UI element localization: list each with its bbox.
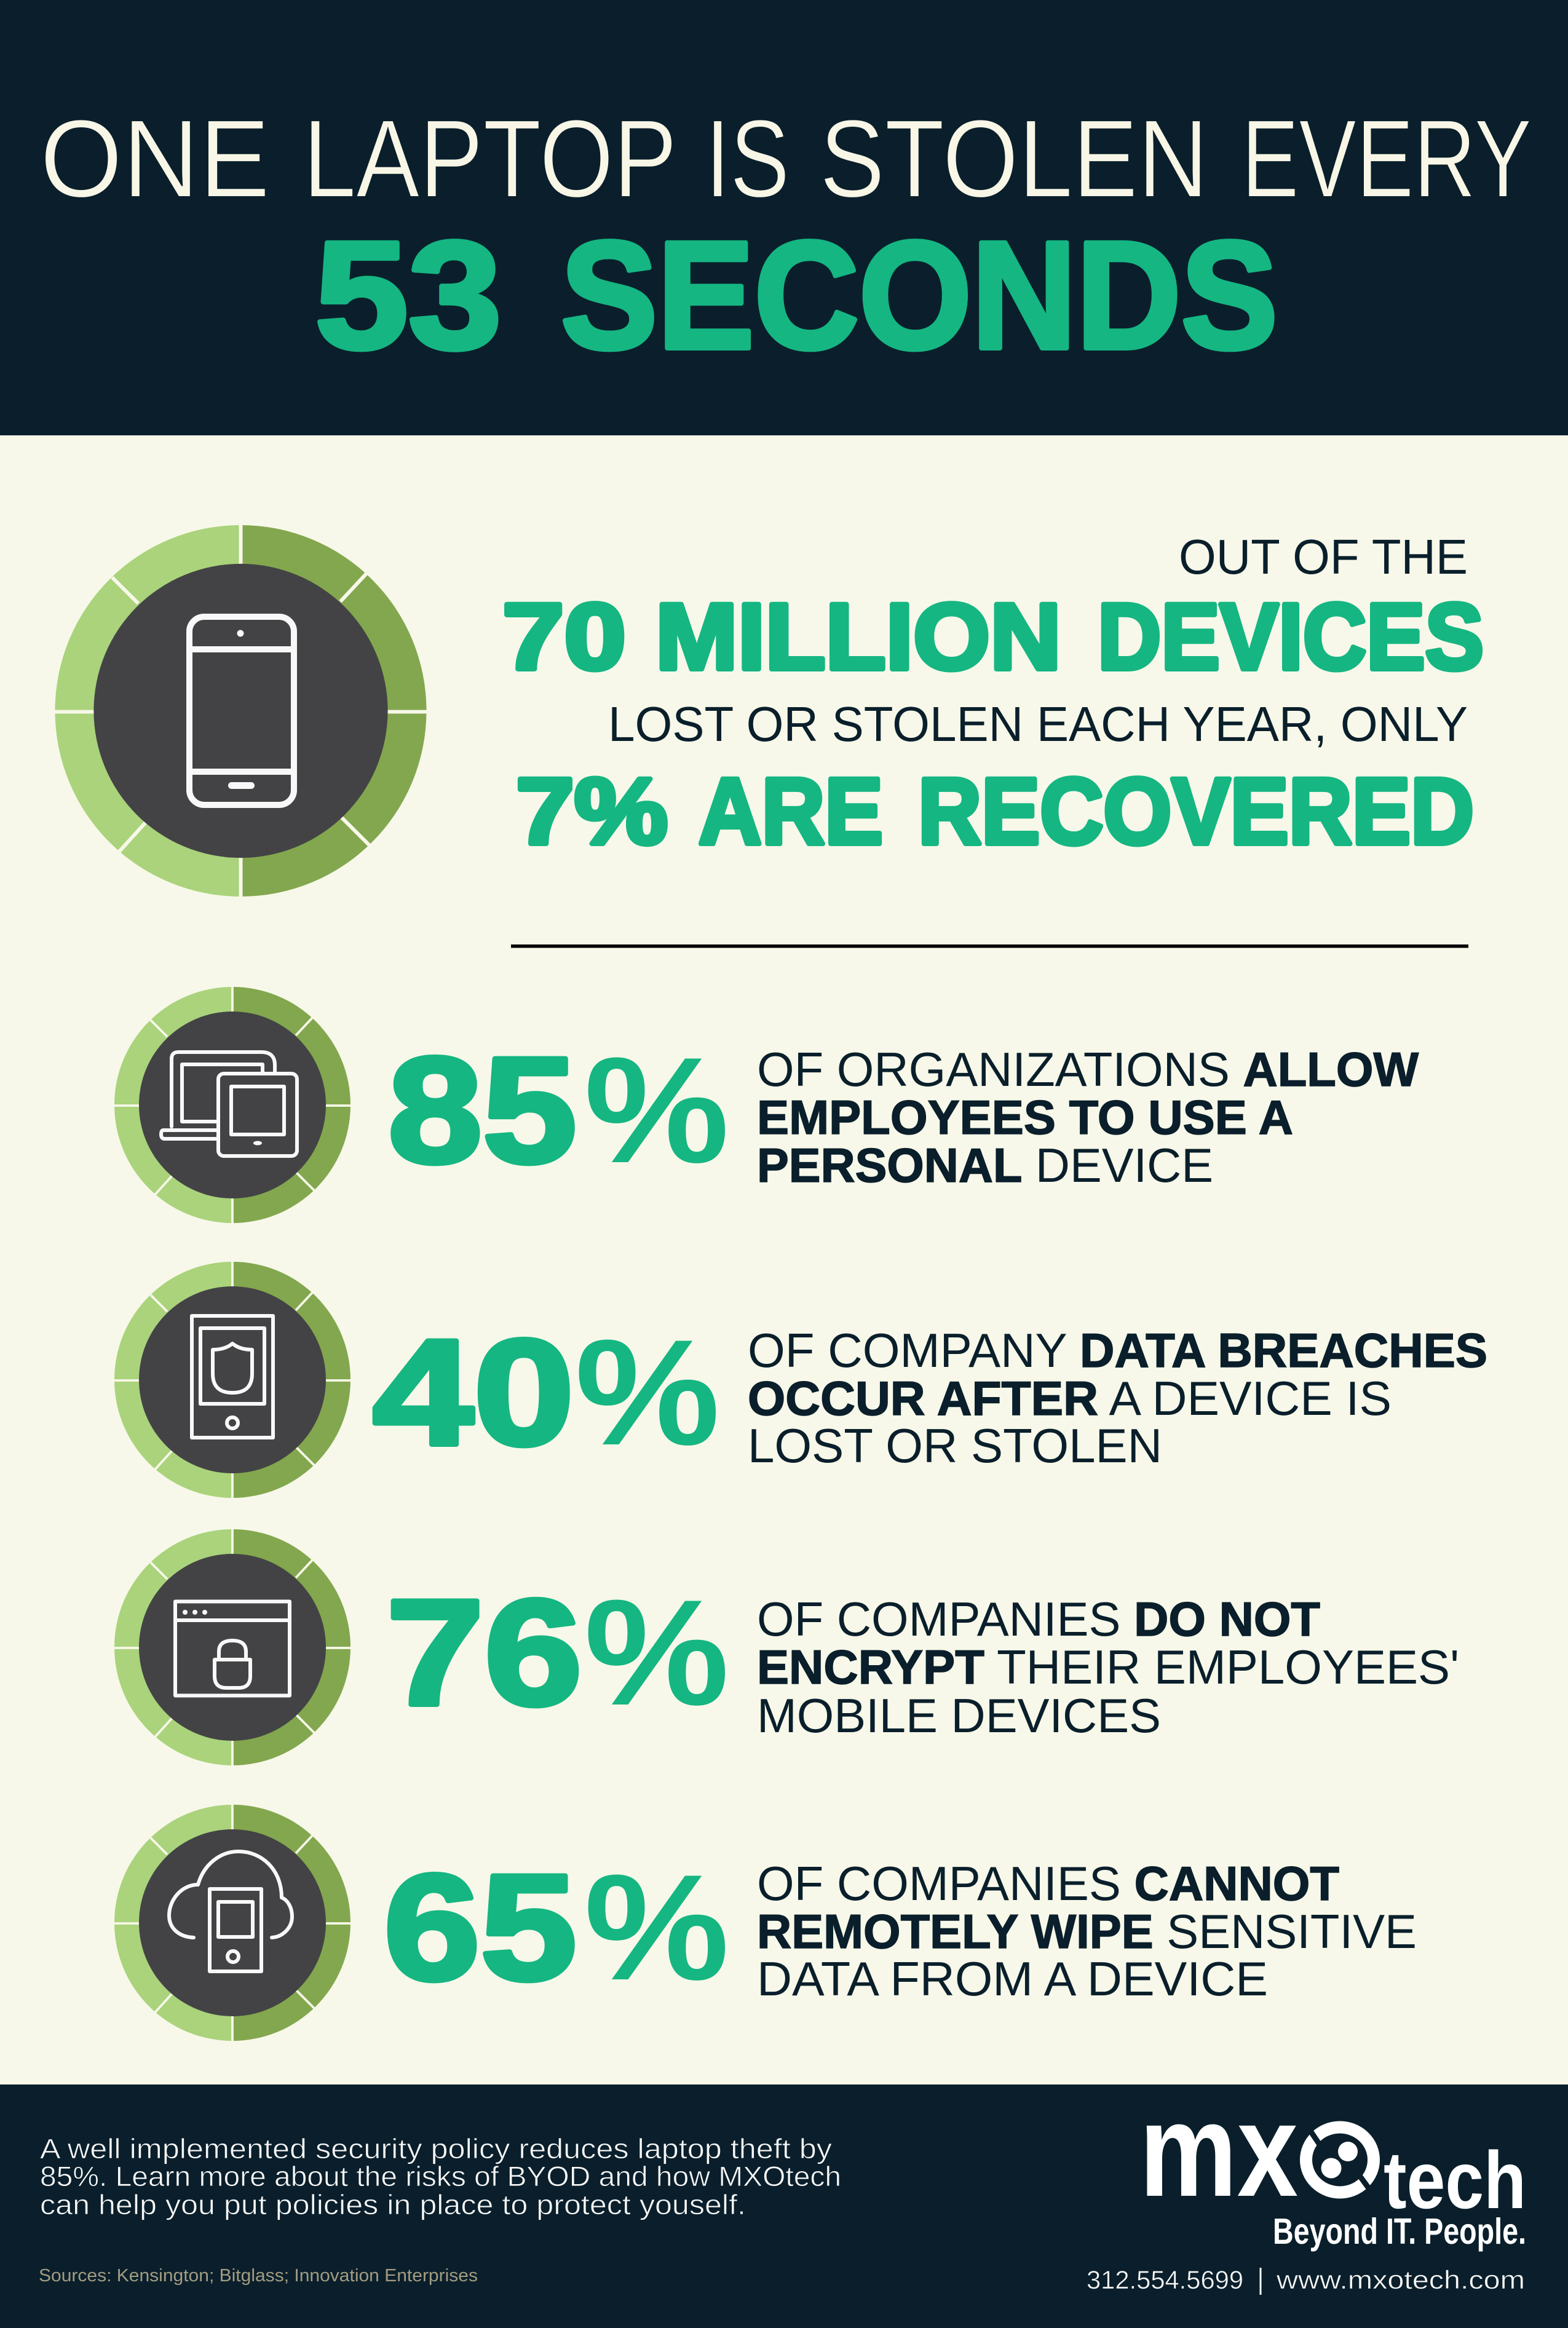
line: 7% are recovered: ARE — [699, 759, 883, 864]
stat text: do not encrypt: MOBILE DEVICES — [757, 1689, 1161, 1743]
title: one laptop is stolen every: LAPTOP — [303, 97, 677, 221]
stat text: allow personal devices: PERSONAL DEVICE — [757, 1138, 1213, 1192]
stat figure: 85%: 85 — [388, 1026, 577, 1194]
ring icon: browser window with lock — [113, 1528, 352, 1767]
stat figure: 76%: % — [584, 1568, 729, 1736]
stat text: cannot remotely wipe: REMOTELY WIPE SENSITIVE — [757, 1904, 1417, 1958]
stat figure: 65%: 65 — [384, 1843, 577, 2011]
MXOtech logo — [1139, 2075, 1526, 2225]
stat text: data breaches — [748, 1323, 1487, 1473]
ring icon: cloud with phone — [113, 1803, 352, 2042]
contact details: 312.554.5699 — [1087, 2265, 1243, 2294]
text block: 70 million devices — [502, 529, 1484, 864]
stat text: cannot remotely wipe: OF COMPANIES CANNOT — [757, 1856, 1339, 1910]
title: one laptop is stolen every: ONE — [40, 97, 270, 221]
stat figure: 65% — [384, 1843, 729, 2011]
headline: 53 seconds: SECONDS — [561, 210, 1278, 381]
stat figure: 85%: % — [584, 1026, 729, 1194]
line: 7% are recovered: 7% — [516, 759, 668, 864]
stat text: data breaches: LOST OR STOLEN — [748, 1419, 1162, 1473]
footer message — [40, 2133, 841, 2220]
stat text: allow personal devices: OF ORGANIZATIONS ALLOW — [757, 1042, 1419, 1096]
MXOtech logo: mx — [1139, 2075, 1298, 2224]
line: 70 million devices: MILLION — [655, 584, 1061, 689]
stat figure: 40%: % — [575, 1308, 720, 1476]
footer message: A well implemented security policy reduces laptop theft by — [40, 2133, 833, 2164]
stat text: do not encrypt: OF COMPANIES DO NOT — [757, 1592, 1320, 1646]
line: 70 million devices: 70 — [502, 584, 626, 689]
title: one laptop is stolen every — [40, 97, 1532, 221]
footer message: can help you put policies in place to protect youself. — [40, 2189, 746, 2220]
stat row: 85% — [113, 986, 1419, 1224]
line: out of the: OUT OF THE — [1179, 529, 1468, 584]
header panel — [0, 0, 1568, 435]
ring icon: tablet with shield — [113, 1261, 352, 1499]
line: 70 million devices: DEVICES — [1098, 584, 1484, 689]
line: 7% are recovered — [516, 759, 1474, 864]
headline: 53 seconds: 53 — [315, 210, 502, 381]
stat text: cannot remotely wipe: DATA FROM A DEVICE — [757, 1952, 1268, 2006]
stat figure: 40%: 40 — [373, 1308, 574, 1476]
sources: Sources: Kensington; Bitglass; Innovation Enterprises — [39, 2266, 478, 2286]
line: 7% are recovered: RECOVERED — [918, 759, 1474, 864]
contact details: www.mxotech.com — [1276, 2265, 1525, 2294]
stat row: 76% — [113, 1528, 1459, 1767]
stat figure: 85% — [388, 1026, 729, 1194]
stat figure: 76% — [386, 1568, 729, 1736]
stat text: do not encrypt — [757, 1592, 1459, 1743]
stat text: cannot remotely wipe — [757, 1856, 1417, 2006]
stat text: do not encrypt: ENCRYPT THEIR EMPLOYEES' — [757, 1640, 1459, 1694]
stat text: data breaches: OF COMPANY DATA BREACHES — [748, 1323, 1487, 1377]
title: one laptop is stolen every: STOLEN — [820, 97, 1208, 221]
footer message: 85%. Learn more about the risks of BYOD and how MXOtech — [40, 2161, 841, 2192]
stat text: allow personal devices: EMPLOYEES TO USE A — [757, 1090, 1293, 1144]
stat row: 65% — [113, 1803, 1417, 2042]
line: 70 million devices — [502, 584, 1484, 689]
MXOtech logo: tech — [1384, 2135, 1526, 2225]
stat text: allow personal devices — [757, 1042, 1419, 1192]
title: one laptop is stolen every: IS — [705, 97, 790, 221]
stat row: 40% — [113, 1261, 1487, 1499]
stat figure: 40% — [373, 1308, 720, 1476]
ring icon: smartphone — [53, 523, 429, 898]
ring icon: laptop and tablet — [113, 986, 352, 1224]
stat figure: 65%: % — [584, 1843, 729, 2011]
footer panel — [0, 2075, 1568, 2328]
line: lost or stolen each year, only: LOST OR STOLEN EACH YEAR, ONLY — [608, 697, 1468, 751]
contact details — [1087, 2265, 1525, 2295]
stat text: data breaches: OCCUR AFTER A DEVICE IS — [748, 1371, 1392, 1425]
stat figure: 76%: 76 — [386, 1568, 582, 1736]
